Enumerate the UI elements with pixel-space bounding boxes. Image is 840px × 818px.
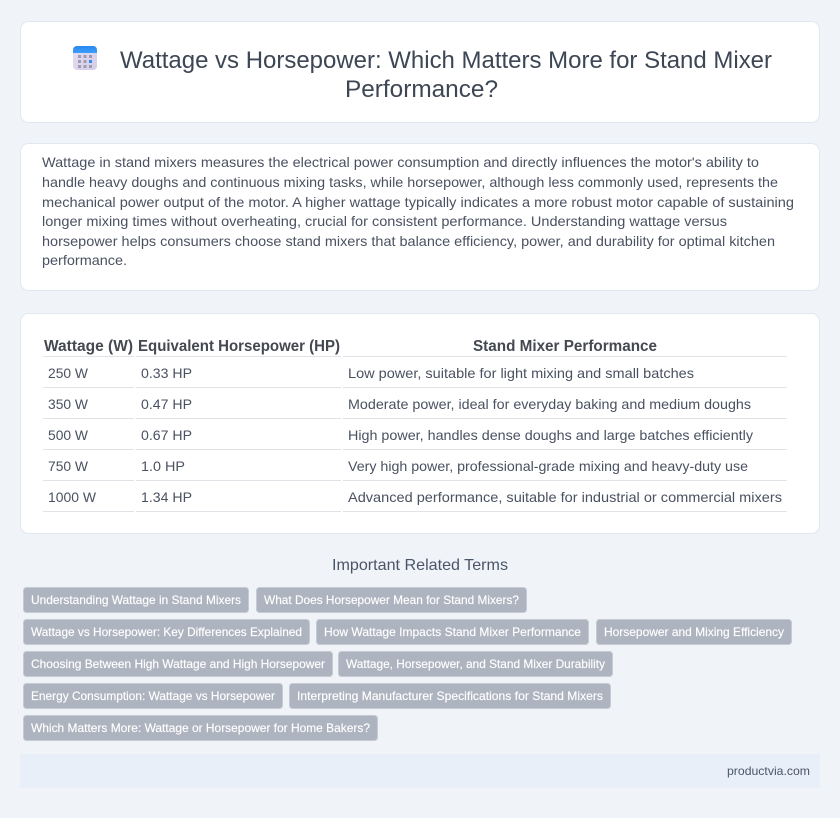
table row: 250 W: 250 W <box>48 365 89 381</box>
text block: description: mechanical power output of the motor. A higher wattage typically indicates a more robust motor capable of sustaining <box>42 194 794 210</box>
tag <box>338 652 612 676</box>
related term tags <box>24 588 792 740</box>
text block: description: horsepower helps consumers choose stand mixers that balance efficiency, power, and durability for optimal kitchen <box>42 233 775 249</box>
table header: Wattage (W) <box>44 338 133 355</box>
footer <box>20 754 820 788</box>
table row: 750 W: 750 W <box>48 458 89 474</box>
tag: Understanding Wattage in Stand Mixers <box>31 593 241 607</box>
tag <box>24 716 378 740</box>
tag <box>24 684 282 708</box>
text block: description: handle heavy doughs and continuous mixing tasks, while horsepower, although less commonly used, represents the <box>42 174 778 190</box>
text block: description: longer mixing times without overheating, crucial for consistent performance. Understanding wattage versus <box>42 213 727 229</box>
tag <box>316 620 588 644</box>
table row: 350 W: Moderate power, ideal for everyday baking and medium doughs <box>348 396 751 412</box>
panel: comparison table <box>20 314 820 534</box>
tag: Energy Consumption: Wattage vs Horsepower <box>31 689 275 703</box>
table row: 750 W: 1.0 HP <box>141 458 185 474</box>
table row: 750 W <box>48 458 748 474</box>
tag <box>290 684 610 708</box>
table row: 350 W: 0.47 HP <box>141 396 192 412</box>
tag <box>24 652 332 676</box>
text block: description: performance. <box>42 252 127 268</box>
tag: Choosing Between High Wattage and High Horsepower <box>31 657 325 671</box>
table row: 1000 W: 1.34 HP <box>141 489 192 505</box>
heading: related terms: Important Related Terms <box>332 557 508 574</box>
table row: 250 W: 0.33 HP <box>141 365 192 381</box>
table row: 250 W: Low power, suitable for light mixing and small batches <box>348 365 694 381</box>
table row: 1000 W: Advanced performance, suitable for industrial or commercial mixers <box>348 489 782 505</box>
table header <box>44 338 657 355</box>
table header: Stand Mixer Performance <box>473 338 657 355</box>
tag: Wattage, Horsepower, and Stand Mixer Durability <box>346 657 605 671</box>
table row: 1000 W <box>48 489 782 505</box>
tag: Which Matters More: Wattage or Horsepower for Home Bakers? <box>31 721 370 735</box>
tag: Wattage vs Horsepower: Key Differences Explained <box>31 625 302 639</box>
tag <box>24 620 310 644</box>
table row: 500 W: 500 W <box>48 427 89 443</box>
title: Wattage vs Horsepower: Which Matters More for Stand Mixer <box>120 47 772 74</box>
tag <box>596 620 792 644</box>
tag: Horsepower and Mixing Efficiency <box>604 625 784 639</box>
table row: 500 W: High power, handles dense doughs and large batches efficiently <box>348 427 753 443</box>
text block: description: Wattage in stand mixers measures the electrical power consumption and directly influences the motor's ability to <box>42 154 759 170</box>
table row: 250 W <box>48 365 694 381</box>
panel: description <box>20 144 820 290</box>
title: Performance? <box>345 76 498 103</box>
panel: header <box>20 22 820 122</box>
table row: 1000 W: 1000 W <box>48 489 97 505</box>
icon: calendar <box>73 46 97 70</box>
tag <box>24 588 248 612</box>
table row: 500 W <box>48 427 753 443</box>
table header: Equivalent Horsepower (HP) <box>138 338 340 355</box>
tag: How Wattage Impacts Stand Mixer Performance <box>324 625 581 639</box>
tag: Interpreting Manufacturer Specifications for Stand Mixers <box>297 689 603 703</box>
table row: 750 W: Very high power, professional-grade mixing and heavy-duty use <box>348 458 748 474</box>
tag <box>256 588 526 612</box>
tag: What Does Horsepower Mean for Stand Mixers? <box>264 593 519 607</box>
table row: 350 W: 350 W <box>48 396 89 412</box>
table row: 350 W <box>48 396 751 412</box>
table row: 500 W: 0.67 HP <box>141 427 192 443</box>
footer: productvia.com <box>727 764 810 778</box>
